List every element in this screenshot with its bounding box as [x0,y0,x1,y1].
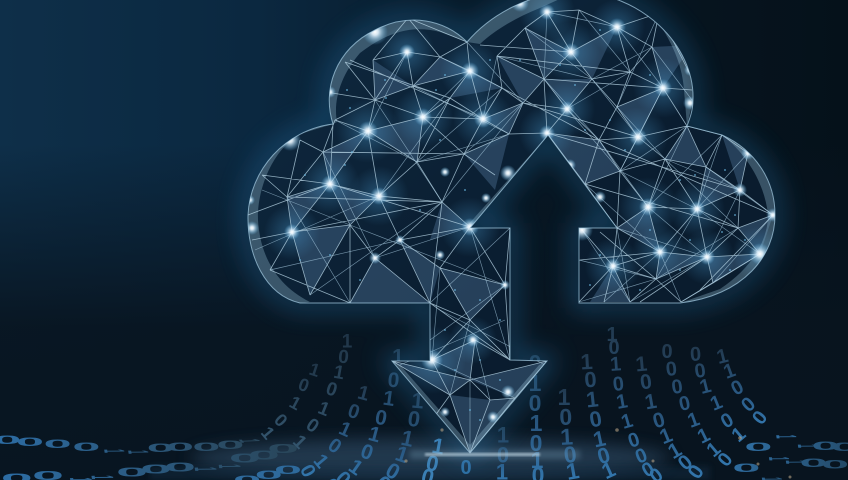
binary stream: left side [0,332,446,480]
binary stream: left side: 10101 [257,359,322,443]
mesh lines [248,10,773,453]
binary stream: right side [460,324,848,480]
binary stream: right side: 0 1100 [744,441,848,471]
binary stream: right side: 10101100 [635,353,709,480]
light streak on floor [410,450,580,459]
binary stream: left side: 00001100001 [0,434,266,455]
binary stream: right side: 00001110 [661,341,737,471]
lit polygon facets [287,27,773,453]
long crossing mesh lines [255,10,773,453]
small particles [300,30,746,420]
cloud with up and down arrows [240,0,788,460]
binary stream: right side: 100 [460,399,480,479]
binary stream: left side: 101010 [295,382,372,480]
cloud body fill [240,0,780,460]
outline edge [248,0,775,453]
binary stream: left side: 1010101 [288,332,353,454]
soft blue haze around nodes [264,0,788,394]
floating light specks [404,428,792,478]
pale rim highlights [248,0,775,453]
cloud glow [248,0,775,453]
mesh nodes [245,0,780,423]
binary stream: right side: 001101 [690,343,750,447]
binary stream: right side: 11000 [714,345,772,429]
